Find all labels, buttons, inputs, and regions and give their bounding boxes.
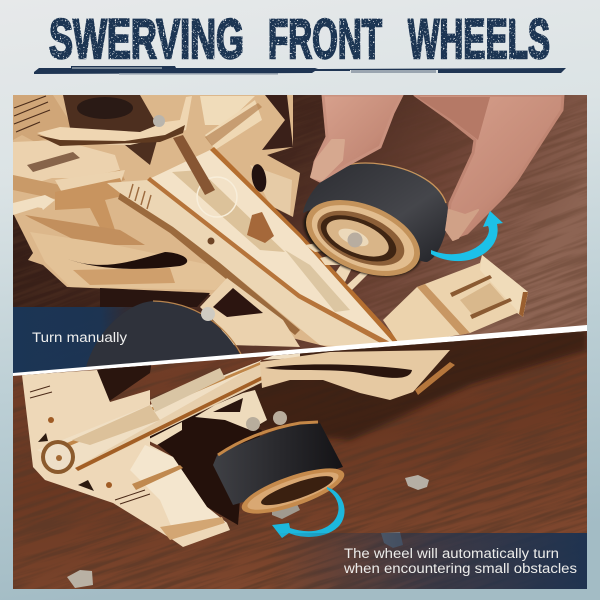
dark cavity by wheel [150,412,262,525]
dark space under car [97,365,152,401]
arrow: upward turn [431,211,503,261]
tire [213,422,343,505]
rock under wheel [272,505,300,519]
wheel rim [242,468,344,514]
table shadow [200,331,587,442]
tire [303,163,449,262]
rear body piece [260,350,455,400]
photo: manual turning [13,95,587,380]
caption: automatic turn: when encountering small obstacles [343,561,577,576]
title: FRONT [268,7,382,70]
wheel rim [306,200,420,276]
right wheel assembly [293,163,528,345]
title [49,7,550,70]
caption: turn manually: Turn manually [32,330,127,345]
lower wheel [213,422,349,523]
suspension arms [195,390,287,431]
nose emblem [41,440,75,474]
car nose [22,370,230,547]
suspension arms [306,244,368,290]
right thumb and hand [415,95,563,240]
rock: centre [405,475,429,490]
small triangular frame [200,278,300,347]
rock: grey [381,532,403,548]
main chassis beam [107,135,398,350]
caption: automatic turn: The wheel will automatically turn [344,546,559,561]
photo: automatic turning [13,330,587,590]
curved arm [37,96,192,145]
left finger [311,95,402,181]
hub bolt [348,232,362,248]
arrow: circular turn [272,487,345,538]
beam top face [147,150,395,345]
rear car body [13,95,336,347]
rock: left [67,570,93,588]
wood tabletop [13,330,587,590]
left wheel [86,300,242,367]
title underline [34,66,566,74]
caption panel: automatic turn [270,533,587,589]
white diagonal divider [13,325,587,376]
beam side face [107,180,395,350]
front wing [383,255,528,345]
caption: automatic turn [343,546,577,576]
caption panel: turn manually [13,307,132,373]
nose beam [37,345,300,471]
title: SWERVING [49,7,244,70]
wood tabletop [13,95,587,380]
